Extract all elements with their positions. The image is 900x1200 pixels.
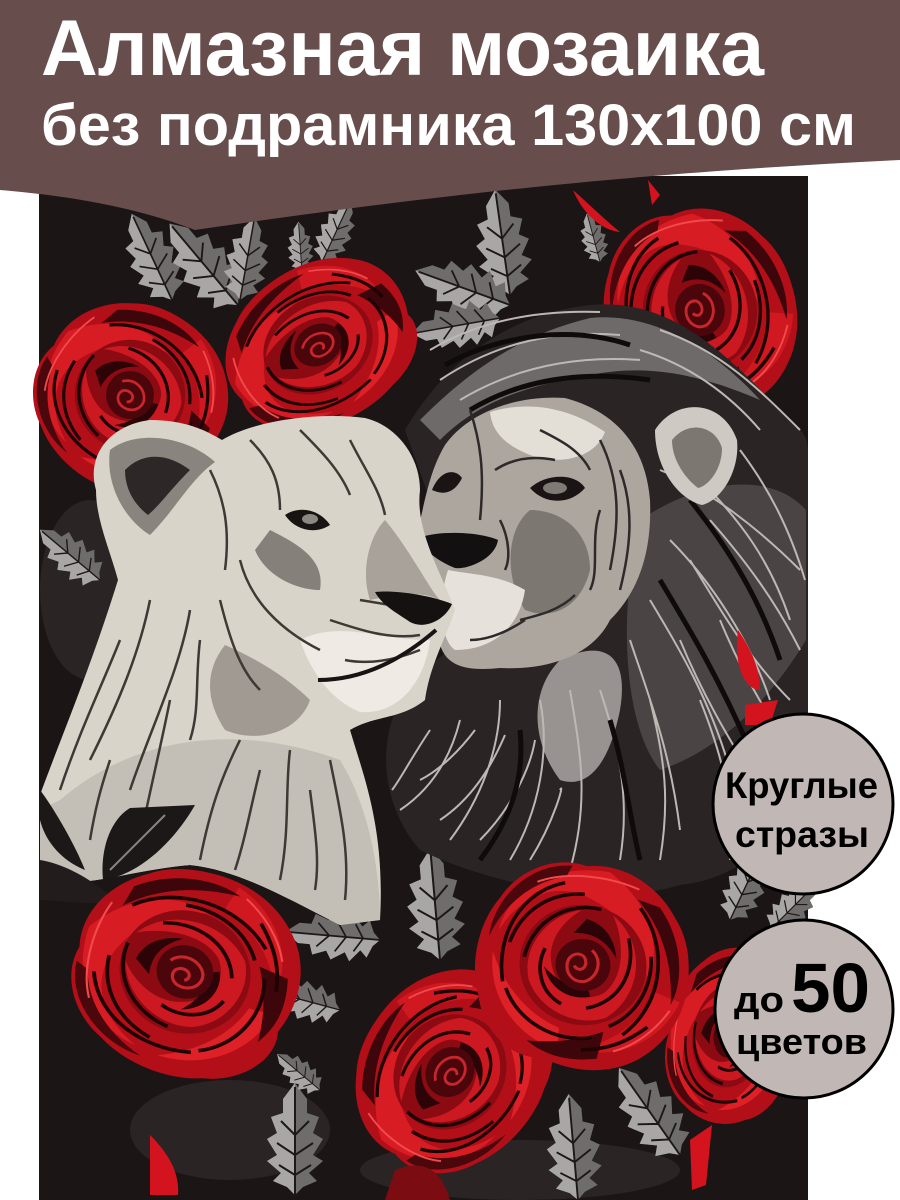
- lioness eye: [285, 510, 330, 530]
- lioness ear: [109, 438, 215, 535]
- lioness body and head: [40, 416, 455, 925]
- badge: up to 50 colors: 50: [791, 949, 870, 1027]
- red petals: [150, 180, 778, 1200]
- painting background: [39, 176, 808, 1200]
- badge: round rhinestones: Круглые: [725, 765, 878, 806]
- lion nose: [418, 533, 498, 568]
- foliage leaves sides and bottom: [27, 515, 829, 1200]
- dark foliage tones: [40, 500, 680, 1200]
- leaves over lioness body: [40, 790, 195, 905]
- subtitle: без подрамника 130х100 см: [41, 93, 856, 158]
- badge: up to 50 colors: [715, 920, 893, 1098]
- lioness fur strokes: [60, 430, 420, 900]
- foliage leaves top: [110, 186, 612, 356]
- lion eyes: [530, 477, 585, 501]
- lion ear: [655, 407, 737, 505]
- badge: up to 50 colors: до: [734, 979, 784, 1020]
- lioness nose: [375, 592, 452, 625]
- upper roses behind the lions: [0, 194, 812, 528]
- title: Алмазная мозаика: [41, 3, 765, 92]
- painting: lions and roses: [0, 176, 829, 1200]
- lioness shading: [255, 530, 321, 590]
- badge: up to 50 colors: цветов: [736, 1021, 867, 1062]
- badge: round rhinestones: стразы: [735, 814, 869, 855]
- lion head: [418, 398, 737, 669]
- header banner: [0, 0, 900, 230]
- lion face: [418, 398, 650, 669]
- badge: round rhinestones: [713, 714, 893, 894]
- lower red roses: [45, 838, 808, 1200]
- lion mane: [386, 304, 808, 894]
